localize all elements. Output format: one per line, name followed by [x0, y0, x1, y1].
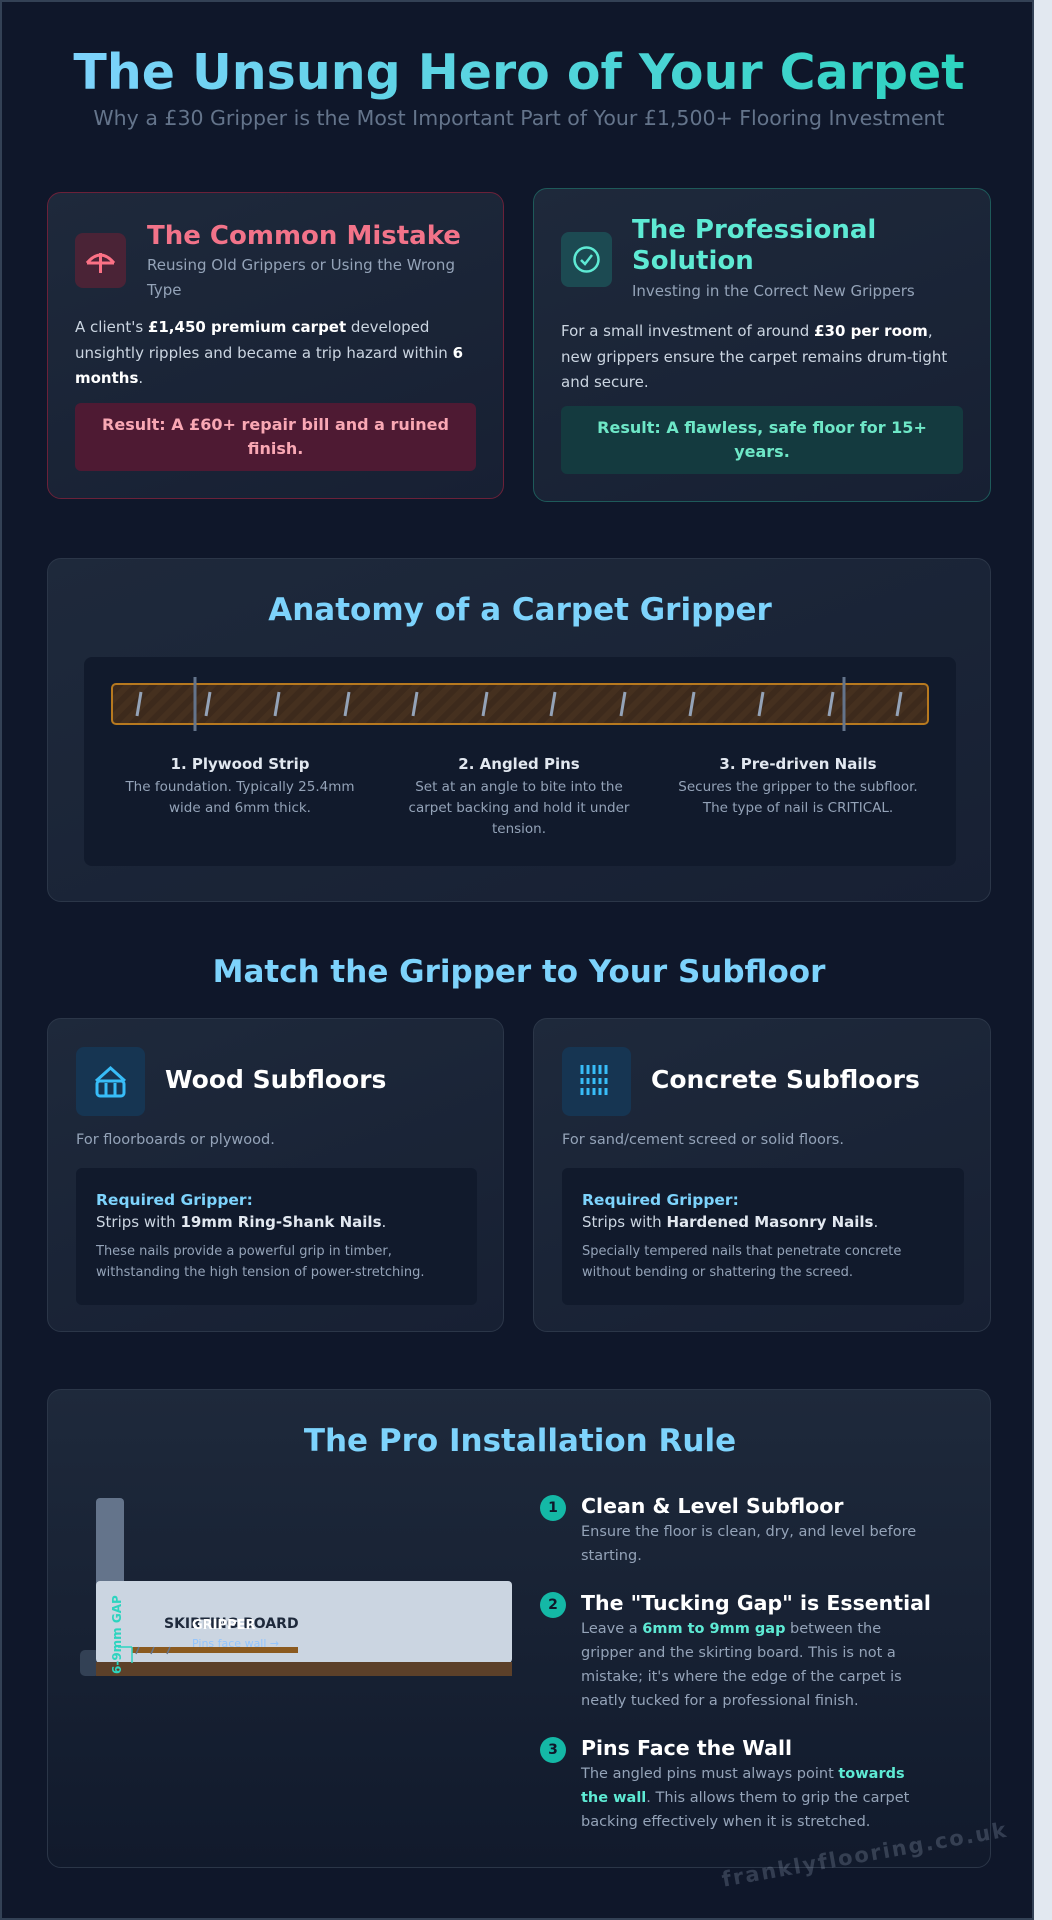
heading	[146, 221, 461, 299]
step 2: Leave a 6mm to 9mm gap between the gripper and the skirting board. This is not a mistake; it's where the edge of the carpet is neatly tucked for a professional finish.	[581, 1621, 902, 1709]
heading: The Pro Installation Rule	[304, 1423, 736, 1459]
heading	[632, 215, 915, 300]
title: The Unsung Hero of Your Carpet	[73, 44, 965, 101]
text: For sand/cement screed or solid floors.	[562, 1132, 844, 1148]
required box: Specially tempered nails that penetrate concrete without bending or shattering the screed.	[582, 1244, 901, 1280]
label: nails: 3. Pre-driven Nails	[719, 755, 877, 773]
step 1: Clean & Level Subfloor	[581, 1494, 843, 1518]
icon: umbrella	[75, 233, 126, 288]
text: For floorboards or plywood.	[76, 1132, 275, 1148]
label: plywood strip: The foundation. Typically 25.4mm wide and 6mm thick.	[125, 779, 355, 816]
label: plywood strip: 1. Plywood Strip	[171, 755, 309, 773]
heading: Anatomy of a Carpet Gripper	[268, 592, 772, 628]
heading: Concrete Subfloors	[651, 1065, 920, 1094]
step 3: The angled pins must always point towards the wall. This allows them to grip the carpet backing effectively when it is stretched.	[581, 1766, 909, 1830]
text block: A client's £1,450 premium carpet developed unsightly ripples and became a trip hazard within 6 months.	[75, 318, 463, 387]
label: gap: 6-9mm GAP	[110, 1595, 124, 1674]
label: skirting board: SKIRTING BOARD	[164, 1616, 299, 1632]
diagram: skirting installation	[80, 1498, 512, 1676]
required box: Strips with 19mm Ring-Shank Nails.	[96, 1213, 386, 1231]
required box: Strips with Hardened Masonry Nails.	[582, 1213, 878, 1231]
panel: installation	[47, 1389, 991, 1868]
label: plywood strip	[125, 755, 355, 816]
callout: result	[561, 406, 963, 474]
icon: concrete grid	[562, 1047, 631, 1116]
heading: Reusing Old Grippers or Using the Wrong Type	[147, 256, 455, 299]
icon: house	[76, 1047, 145, 1116]
subtitle: Why a £30 Gripper is the Most Important Part of Your £1,500+ Flooring Investment	[93, 106, 945, 130]
step 2	[540, 1591, 931, 1709]
step 1: Ensure the floor is clean, dry, and level before starting.	[581, 1524, 916, 1564]
panel: professional solution	[533, 188, 991, 502]
required box	[76, 1168, 477, 1305]
step 1	[540, 1494, 916, 1564]
step 3	[540, 1736, 909, 1830]
step 2: The "Tucking Gap" is Essential	[581, 1591, 931, 1615]
heading: Wood Subfloors	[165, 1065, 386, 1094]
panel: wood subfloors	[47, 1018, 504, 1332]
label: nails: Secures the gripper to the subfloor. The type of nail is CRITICAL.	[678, 779, 918, 816]
label: nails	[678, 755, 918, 816]
panel: anatomy	[47, 558, 991, 902]
required box	[562, 1168, 964, 1305]
heading: The Professional Solution	[632, 215, 876, 276]
panel: common mistake	[47, 192, 504, 499]
required box: These nails provide a powerful grip in timber, withstanding the high tension of power-stretching.	[96, 1244, 424, 1280]
gripper strip diagram	[111, 677, 929, 731]
icon: check	[561, 232, 612, 287]
callout: result	[75, 403, 476, 471]
step 2: 2	[548, 1597, 558, 1613]
heading: Investing in the Correct New Grippers	[632, 282, 915, 300]
step 3: Pins Face the Wall	[581, 1736, 792, 1760]
step 3: 3	[548, 1742, 558, 1758]
heading: The Common Mistake	[147, 221, 461, 251]
step 1: 1	[548, 1500, 558, 1516]
required box: Required Gripper:	[582, 1191, 739, 1209]
diagram box	[84, 657, 956, 866]
callout: result: Result: A flawless, safe floor for 15+ years.	[597, 418, 927, 461]
label: gripper: GRIPPER	[192, 1618, 255, 1633]
label: angled pins: 2. Angled Pins	[458, 755, 580, 773]
panel: concrete subfloors	[533, 1018, 991, 1332]
heading: match: Match the Gripper to Your Subfloor	[213, 954, 825, 990]
text block: For a small investment of around £30 per room, new grippers ensure the carpet remains drum-tight and secure.	[561, 322, 947, 391]
label: pins face wall: Pins face wall →	[192, 1637, 279, 1650]
required box: Required Gripper:	[96, 1191, 253, 1209]
label: angled pins: Set at an angle to bite into the carpet backing and hold it under tension.	[409, 779, 629, 837]
watermark: franklyflooring.co.uk	[720, 1818, 1010, 1892]
callout: result: Result: A £60+ repair bill and a ruined finish.	[102, 415, 449, 458]
